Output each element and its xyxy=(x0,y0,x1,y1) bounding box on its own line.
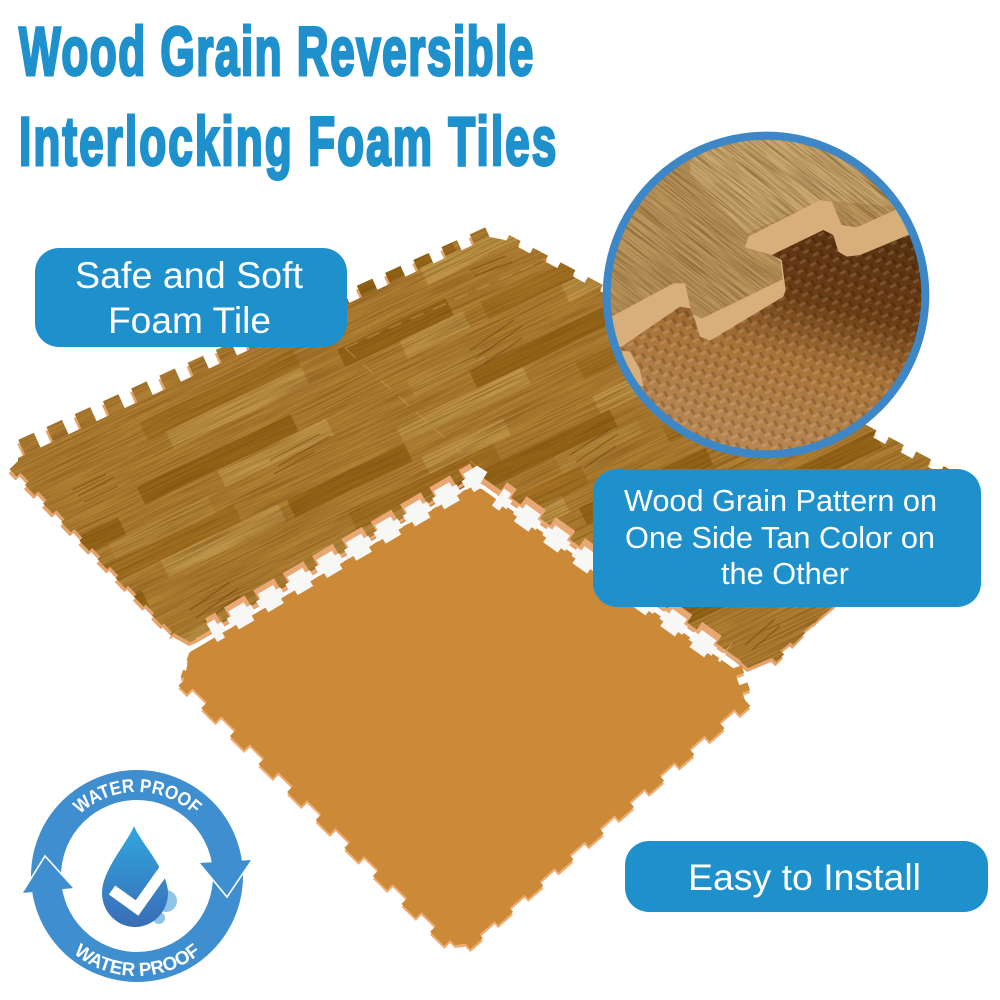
inset: close-up of interlocking joint xyxy=(602,132,930,458)
foam mat: wood grain side xyxy=(8,227,950,672)
callout: wood grain pattern xyxy=(593,469,981,607)
inset foam side face xyxy=(612,200,909,347)
wood knots and grain streaks xyxy=(72,256,780,650)
badge ring xyxy=(46,785,228,967)
left arrowhead xyxy=(22,856,74,893)
callout: wood grain pattern: the Other xyxy=(721,557,849,591)
callout: easy to install xyxy=(625,841,988,912)
inset ring border xyxy=(607,136,925,454)
wood grain planks xyxy=(10,227,950,668)
inset small foam piece xyxy=(622,351,643,387)
callout: wood grain pattern: Wood Grain Pattern on xyxy=(624,484,937,518)
title: Interlocking Foam Tiles xyxy=(19,104,558,180)
notch rim on wood tile xyxy=(196,474,740,662)
right arrowhead xyxy=(199,860,252,897)
wood mat side edge xyxy=(15,239,944,672)
callout: easy to install: Easy to Install xyxy=(688,856,921,898)
white interlock cut-outs xyxy=(212,478,723,658)
callout: safe and soft: Foam Tile xyxy=(108,299,271,341)
seam between wood tiles xyxy=(344,258,546,466)
callout: safe and soft xyxy=(35,248,347,347)
badge: water proof xyxy=(23,770,251,982)
inset floor texture xyxy=(620,230,922,450)
inset wood top surface xyxy=(610,140,896,318)
bottom arc label: WATER PROOF xyxy=(76,942,198,976)
title: Wood Grain Reversible xyxy=(19,14,535,90)
foam tile: tan reverse side xyxy=(184,487,745,948)
callout: safe and soft: Safe and Soft xyxy=(75,254,304,296)
white gap line xyxy=(190,483,738,668)
tan tile top face xyxy=(184,487,745,945)
top arc label: WATER PROOF xyxy=(72,779,202,812)
tan tile side edge xyxy=(184,490,745,948)
title xyxy=(19,14,558,180)
icon: water drop with check xyxy=(102,826,177,927)
callout: wood grain pattern: One Side Tan Color on xyxy=(625,521,935,555)
